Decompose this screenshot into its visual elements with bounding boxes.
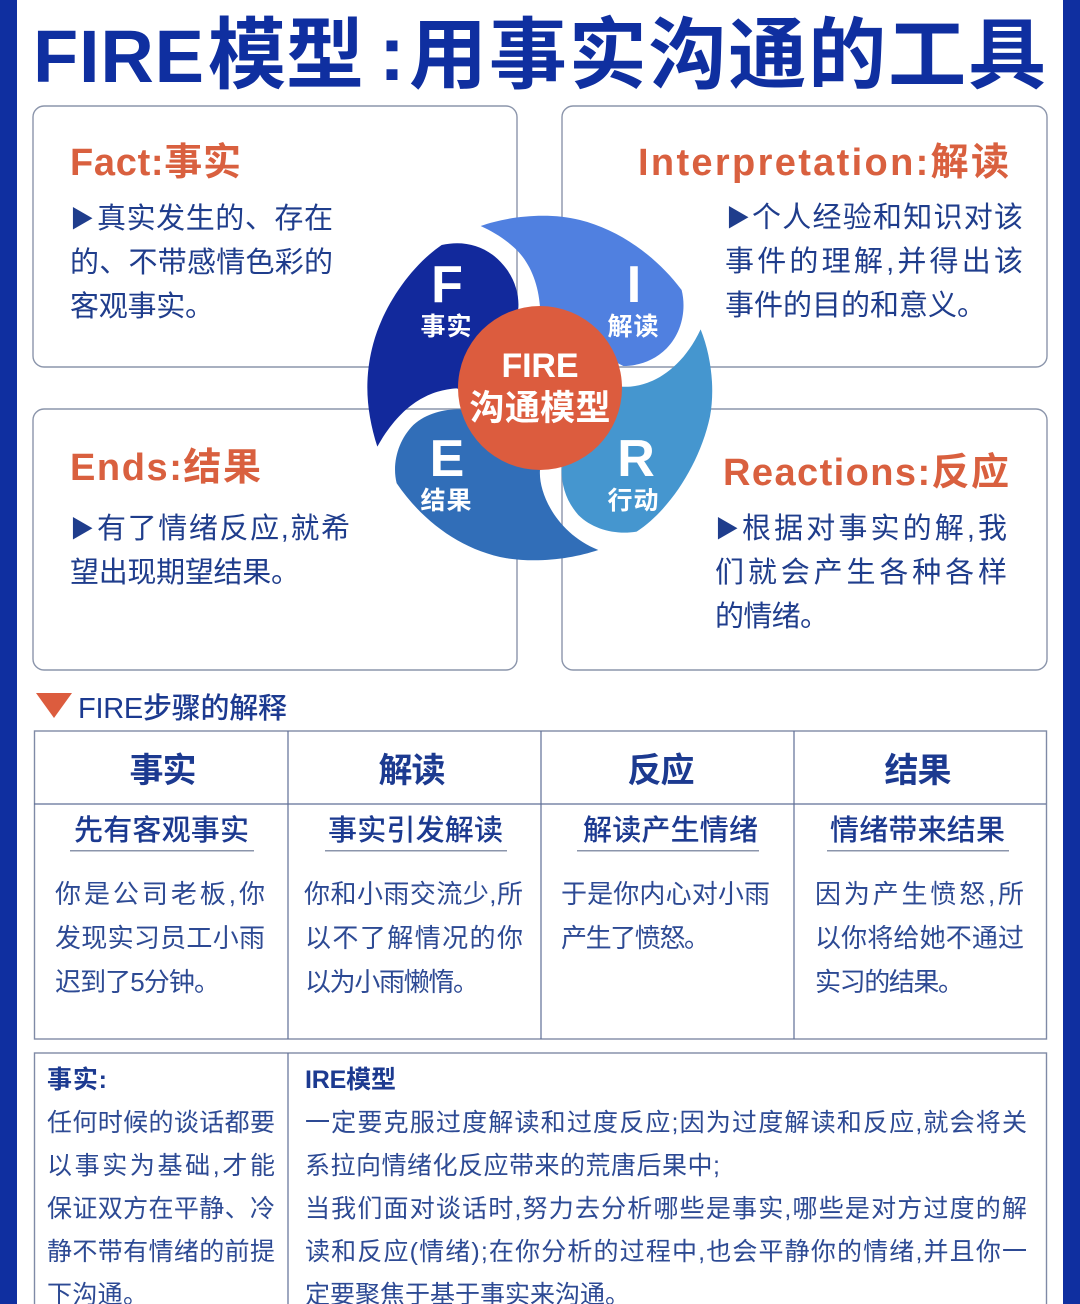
panel: interpretation: Interpretation:解读 <box>638 142 1009 184</box>
label: E: E <box>430 430 464 488</box>
label: I: 解读 <box>608 313 658 341</box>
column: fact: 发现实习员工小雨 <box>55 923 265 953</box>
petal: R <box>562 329 712 533</box>
note: fact: 以事实为基础,才能 <box>47 1152 275 1180</box>
title: : <box>379 9 405 97</box>
title: 模型 <box>208 11 364 99</box>
note: IRE model: 系拉向情绪化反应带来的荒唐后果中; <box>305 1152 720 1180</box>
center circle <box>458 306 622 470</box>
panel: fact: 的、不带感情色彩的 <box>70 246 333 279</box>
panel: interpretation: 个人经验和知识对该 <box>752 201 1023 234</box>
section heading: FIRE步骤的解释 <box>78 692 287 725</box>
column: interpretation <box>304 752 523 997</box>
label: R: 行动 <box>608 487 658 515</box>
label: E <box>420 430 472 515</box>
panel: ends: 望出现期望结果。 <box>70 556 300 589</box>
note: fact <box>47 1066 275 1304</box>
panel: fact: ▶ <box>70 206 94 233</box>
column: ends: 以你将给她不通过 <box>815 923 1024 953</box>
panel: interpretation: 事件的理解,并得出该 <box>725 245 1023 278</box>
note: fact: 事实: <box>47 1066 107 1094</box>
title: 用事实沟通的工具 <box>409 11 1046 99</box>
petal: E <box>395 409 598 560</box>
column: interpretation: 以为小雨懒惰。 <box>305 967 479 997</box>
note: fact: 任何时候的谈话都要 <box>47 1109 275 1137</box>
column: interpretation: 事实引发解读 <box>328 814 503 847</box>
column: reaction: 于是你内心对小雨 <box>561 879 770 909</box>
table: FIRE steps <box>34 731 1046 1039</box>
label: F: F <box>431 256 463 314</box>
label: F: 事实 <box>420 313 472 341</box>
title: FIRE <box>33 15 204 98</box>
column: ends: 情绪带来结果 <box>830 814 1005 847</box>
column: ends: 结果 <box>884 752 952 790</box>
column: ends: 因为产生愤怒,所 <box>815 879 1024 909</box>
label: R <box>608 430 658 515</box>
column: fact: 先有客观事实 <box>74 814 249 847</box>
note: IRE model <box>305 1066 1027 1304</box>
panel: reactions: 的情绪。 <box>715 600 829 633</box>
center label <box>470 347 610 428</box>
note: fact: 静不带有情绪的前提 <box>47 1238 275 1266</box>
panel: reactions <box>562 409 1047 670</box>
column: interpretation: 解读 <box>378 752 446 790</box>
panel: fact: Fact:事实 <box>70 142 241 184</box>
icon: orange triangle <box>36 693 72 718</box>
panel: interpretation: 事件的目的和意义。 <box>725 289 986 322</box>
column: reaction: 解读产生情绪 <box>583 814 758 847</box>
panel: reactions: 们就会产生各种各样 <box>715 556 1007 589</box>
column: ends: 实习的结果。 <box>815 967 964 997</box>
center label: FIRE <box>502 347 578 385</box>
label: F <box>420 256 472 341</box>
column: interpretation: 以不了解情况的你 <box>305 923 523 953</box>
column: fact: 迟到了5分钟。 <box>55 967 220 997</box>
panel: interpretation: ▶ <box>726 205 750 232</box>
center label: 沟通模型 <box>470 389 610 428</box>
column: reaction: 反应 <box>628 752 694 790</box>
panel: ends: 有了情绪反应,就希 <box>97 512 350 545</box>
panel: reactions: Reactions:反应 <box>723 452 1009 494</box>
column: fact <box>55 752 265 997</box>
column: interpretation: 你和小雨交流少,所 <box>304 879 523 909</box>
column: ends <box>815 752 1024 997</box>
diagram: FIRE pinwheel <box>367 216 712 560</box>
column: fact: 你是公司老板,你 <box>55 879 265 909</box>
petal: F <box>367 243 518 447</box>
panel: ends: ▶ <box>70 516 94 543</box>
column: reaction: 产生了愤怒。 <box>561 923 710 953</box>
column: fact: 事实 <box>130 752 196 790</box>
title <box>33 9 1046 99</box>
label: R: R <box>617 430 655 488</box>
panel: ends: Ends:结果 <box>70 447 261 489</box>
petal: I <box>481 216 684 366</box>
panel: fact <box>33 106 517 367</box>
column: reaction <box>561 752 770 953</box>
panel: ends <box>33 409 517 670</box>
note: IRE model: 一定要克服过度解读和过度反应;因为过度解读和反应,就会将关 <box>305 1109 1027 1137</box>
label: I: I <box>627 256 641 314</box>
label: E: 结果 <box>420 487 472 515</box>
panel: fact: 真实发生的、存在 <box>97 202 333 235</box>
note: IRE model: IRE模型 <box>305 1066 396 1094</box>
note: fact: 保证双方在平静、冷 <box>47 1195 275 1223</box>
label: I <box>608 256 658 341</box>
notes table <box>34 1053 1046 1304</box>
panel: reactions: ▶ <box>715 516 739 543</box>
note: IRE model: 当我们面对谈话时,努力去分析哪些是事实,哪些是对方过度的解 <box>305 1195 1027 1223</box>
panel: fact: 客观事实。 <box>70 290 214 323</box>
note: IRE model: 读和反应(情绪);在你分析的过程中,也会平静你的情绪,并且你一 <box>305 1238 1027 1266</box>
panel: interpretation <box>562 106 1047 367</box>
panel: reactions: 根据对事实的解,我 <box>742 512 1007 545</box>
